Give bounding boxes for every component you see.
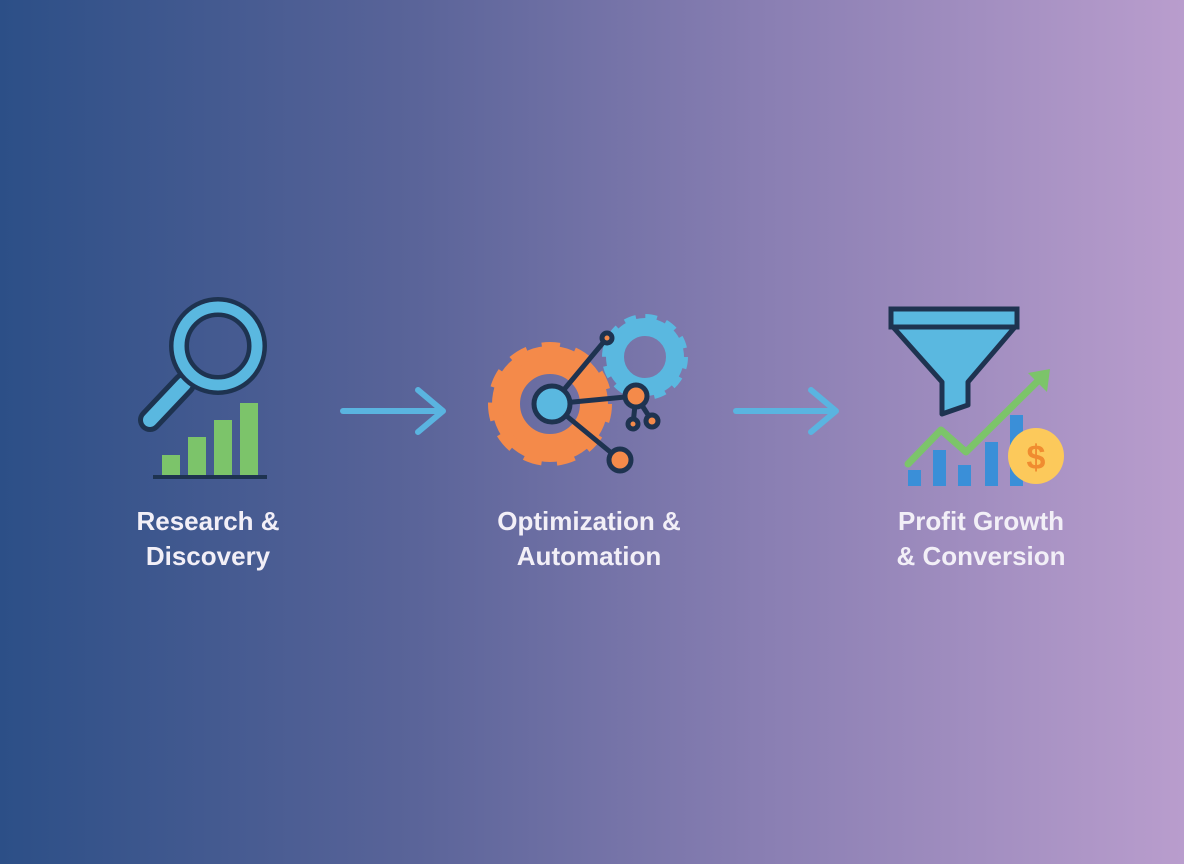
arrow 1 (343, 390, 443, 432)
arrow 2 (736, 390, 836, 432)
label 3: & Conversion (896, 541, 1066, 571)
icon: funnel and growth: $ (1027, 439, 1046, 477)
icon: funnel and growth (891, 309, 1064, 486)
icon: gears network (495, 319, 683, 471)
label 2 (497, 506, 681, 571)
label 3 (896, 506, 1066, 571)
label 3: Profit Growth (898, 506, 1064, 536)
label 2: Optimization & (497, 506, 681, 536)
label 2: Automation (517, 541, 661, 571)
icon: magnifier with bars (150, 307, 267, 477)
label 1: Research & (136, 506, 280, 536)
label 1: Discovery (146, 541, 270, 571)
label 1 (136, 506, 280, 571)
